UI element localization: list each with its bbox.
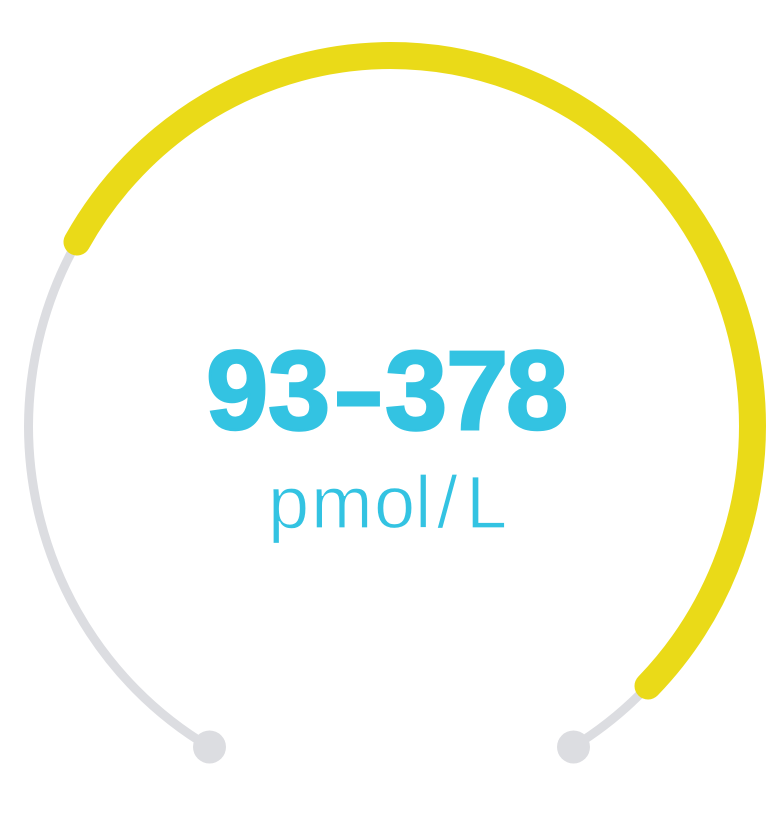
gauge start dot [193, 730, 226, 764]
gauge track: grey right arc [574, 686, 648, 746]
value range: 378 [385, 328, 568, 453]
value range: 93 [206, 328, 330, 453]
unit label: pmol/L [268, 461, 507, 544]
gauge value: yellow arc [77, 56, 753, 686]
gauge track: grey left arc [28, 242, 209, 747]
value range: – [336, 328, 381, 453]
gauge end dot [557, 730, 590, 764]
value range [206, 328, 568, 453]
